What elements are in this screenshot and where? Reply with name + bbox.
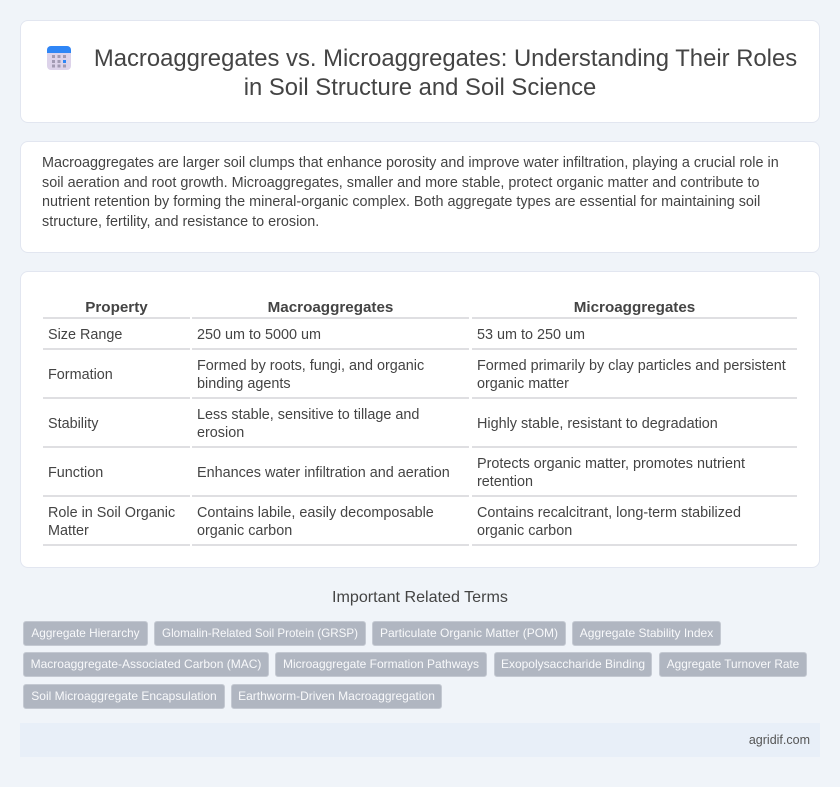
table header row: Macroaggregates <box>268 299 393 316</box>
intro text: Macroaggregates are larger soil clumps that enhance porosity and improve water infiltration, playing a crucial role in <box>42 155 779 171</box>
tag: Particulate Organic Matter (POM) <box>380 626 558 640</box>
row: formation: Formation <box>48 367 113 383</box>
row: formation: organic matter <box>477 376 569 392</box>
row: role in soil organic matter <box>43 505 797 546</box>
intro text: nutrient retention by forming the mineral-organic complex. Both aggregate types are essential for maintaining soil <box>42 194 760 210</box>
tag <box>154 621 366 646</box>
row: stability: Less stable, sensitive to tillage and <box>197 407 419 423</box>
row: size range <box>43 327 797 350</box>
tag: Glomalin-Related Soil Protein (GRSP) <box>162 627 358 640</box>
tag <box>572 621 721 646</box>
tag <box>494 652 652 677</box>
row: role in soil organic matter: organic carbon <box>197 523 292 539</box>
tag: Aggregate Stability Index <box>580 626 713 640</box>
tag <box>659 652 807 677</box>
row: size range: 250 um to 5000 um <box>197 327 321 343</box>
row: size range: 53 um to 250 um <box>477 327 585 343</box>
tag: Aggregate Hierarchy <box>31 626 140 640</box>
row: stability: Stability <box>48 416 98 432</box>
table header row: Property <box>85 299 148 316</box>
footer bar <box>20 723 820 757</box>
tag <box>23 621 148 646</box>
row: role in soil organic matter: Contains recalcitrant, long-term stabilized <box>477 505 741 521</box>
row: function: Enhances water infiltration and aeration <box>197 465 450 481</box>
footer source: agridif.com <box>749 733 810 747</box>
tag: Aggregate Turnover Rate <box>667 657 799 671</box>
tag: Microaggregate Formation Pathways <box>283 657 479 671</box>
row: role in soil organic matter: organic carbon <box>477 523 572 539</box>
row: function: retention <box>477 474 533 490</box>
row: role in soil organic matter: Role in Soil Organic <box>48 505 175 521</box>
tag <box>231 684 442 709</box>
row: role in soil organic matter: Contains labile, easily decomposable <box>197 505 434 521</box>
row: function <box>43 456 797 497</box>
title: Macroaggregates vs. Microaggregates: Understanding Their Roles <box>94 45 797 72</box>
row: stability <box>43 407 797 448</box>
tag <box>23 652 269 677</box>
row: function: Protects organic matter, promotes nutrient <box>477 456 745 472</box>
related term tags <box>23 621 807 709</box>
row: formation: Formed primarily by clay particles and persistent <box>477 358 786 374</box>
table header row <box>43 299 797 319</box>
title <box>94 45 797 101</box>
tag <box>372 621 566 646</box>
related terms heading: Important Related Terms <box>332 588 508 606</box>
tag: Exopolysaccharide Binding <box>501 657 645 671</box>
tag: Macroaggregate-Associated Carbon (MAC) <box>31 657 261 671</box>
row: size range: Size Range <box>48 327 122 343</box>
tag: Soil Microaggregate Encapsulation <box>31 689 217 703</box>
row: stability: erosion <box>197 425 244 441</box>
tag <box>275 652 487 677</box>
panel: header <box>20 20 820 123</box>
title: in Soil Structure and Soil Science <box>244 74 596 101</box>
row: formation: Formed by roots, fungi, and organic <box>197 358 424 374</box>
tag <box>23 684 225 709</box>
row: role in soil organic matter: Matter <box>48 523 89 539</box>
row: stability: Highly stable, resistant to degradation <box>477 416 718 432</box>
intro text: structure, fertility, and resistance to erosion. <box>42 214 319 230</box>
panel: comparison table <box>20 271 820 568</box>
panel: introduction <box>20 141 820 253</box>
tag: Earthworm-Driven Macroaggregation <box>238 689 435 703</box>
icon: calendar <box>47 46 71 70</box>
intro text <box>42 155 779 230</box>
row: function: Function <box>48 465 103 481</box>
row: formation <box>43 358 797 399</box>
row: formation: binding agents <box>197 376 291 392</box>
table header row: Microaggregates <box>574 299 695 316</box>
intro text: soil aeration and root growth. Microaggregates, smaller and more stable, protect organic matter and contribute to <box>42 175 760 191</box>
